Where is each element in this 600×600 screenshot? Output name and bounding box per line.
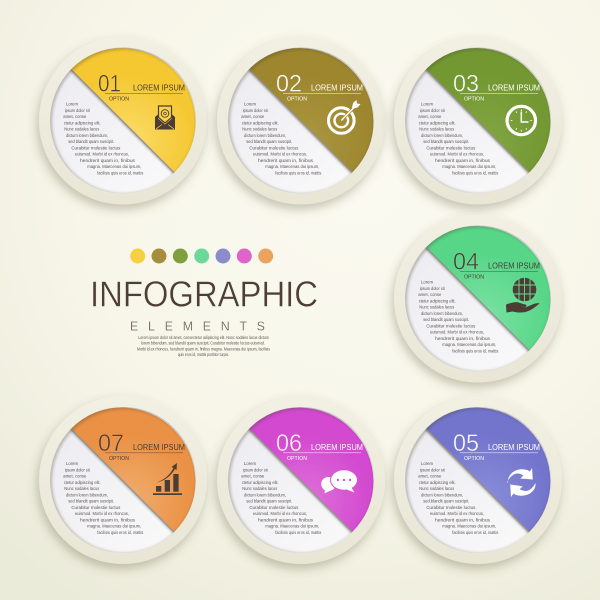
body text: dictum lorem bibendum, xyxy=(244,492,286,497)
body text: Curabitur molestie luctus xyxy=(249,505,298,510)
body text: magna. Maecenas dui ipsum, xyxy=(442,524,496,529)
number 06: 06 xyxy=(276,430,302,457)
number 01: 01 xyxy=(98,70,121,98)
body text: Lorem xyxy=(66,461,78,466)
body text: dictum lorem bibendum, xyxy=(421,492,463,497)
body text: Curabitur molestie luctus xyxy=(426,323,475,328)
body text: hendrerit quam in, finibus xyxy=(258,517,313,522)
icon: globe held in hand xyxy=(506,278,540,313)
body text: dictum lorem bibendum, xyxy=(421,133,463,138)
body text: ctetur adipiscing elit. xyxy=(242,480,279,485)
body text: magna. Maecenas dui ipsum, xyxy=(442,342,496,347)
heading: LOREM IPSUM xyxy=(488,262,540,270)
body text: sed blandit quam suscipit. xyxy=(246,139,292,144)
body text: hendrerit quam in, finibus xyxy=(435,158,490,163)
title: INFOGRAPHIC xyxy=(90,274,318,315)
body text: dictum lorem bibendum, xyxy=(66,133,108,138)
body text: ctetur adipiscing elit. xyxy=(419,298,456,303)
body text: ipsum dolor sit xyxy=(420,467,445,472)
body text: ipsum dolor sit xyxy=(65,467,90,472)
heading: LOREM IPSUM xyxy=(488,84,540,92)
number 05: 05 xyxy=(453,430,479,457)
body text: dictum lorem bibendum, xyxy=(66,492,108,497)
body text: Lorem xyxy=(421,102,433,106)
body text: amet, conse xyxy=(241,474,265,479)
body text: magna. Maecenas dui ipsum, xyxy=(265,524,319,529)
body text: Nunc sodales lacus xyxy=(242,127,277,132)
body text: amet, conse xyxy=(418,114,442,119)
body text: facilisis quis eros id, mattis xyxy=(97,170,143,175)
body text xyxy=(63,102,143,175)
body text: euismod. Morbi id ex rhoncus, xyxy=(430,511,484,516)
body text: amet, conse xyxy=(63,114,87,119)
body text: Lorem xyxy=(421,280,433,284)
body text: magna. Maecenas dui ipsum, xyxy=(87,524,141,529)
body text: magna. Maecenas dui ipsum, xyxy=(87,164,141,169)
body text: hendrerit quam in, finibus xyxy=(80,517,135,522)
body text: euismod. Morbi id ex rhoncus, xyxy=(253,152,307,157)
body text: amet, conse xyxy=(418,474,442,479)
body text: sed blandit quam suscipit. xyxy=(423,139,469,144)
body text: hendrerit quam in, finibus xyxy=(435,336,490,341)
option label: OPTION xyxy=(464,96,484,102)
body text: ctetur adipiscing elit. xyxy=(419,480,456,485)
description paragraph: quis eros id, mattis porttitor turpis. xyxy=(178,352,229,357)
body text: Curabitur molestie luctus xyxy=(426,505,475,510)
description paragraph: lorem bibendum, sed blandit quam suscipit. Curabitur molestie luctus euismod. xyxy=(141,341,265,346)
colour dots row xyxy=(130,248,273,264)
body text: ipsum dolor sit xyxy=(243,467,268,472)
body text xyxy=(241,102,321,175)
heading: LOREM IPSUM xyxy=(488,443,540,452)
circle card 03: clock xyxy=(394,36,562,204)
body text: sed blandit quam suscipit. xyxy=(246,499,292,504)
body text: euismod. Morbi id ex rhoncus, xyxy=(430,330,484,335)
body text xyxy=(418,102,498,175)
body text xyxy=(418,280,498,353)
option label: OPTION xyxy=(109,456,129,462)
body text: Nunc sodales lacus xyxy=(64,127,99,132)
option label: OPTION xyxy=(109,96,129,102)
circle card 05: refresh xyxy=(394,396,562,564)
description paragraph: Lorem ipsum dolor sit amet, consectetur adipiscing elit. Nunc sodales lacus dictum xyxy=(138,335,269,340)
number 02: 02 xyxy=(276,70,302,98)
body text: hendrerit quam in, finibus xyxy=(80,158,135,163)
body text xyxy=(418,461,498,535)
body text: Lorem xyxy=(244,102,256,106)
body text: Nunc sodales lacus xyxy=(419,127,454,132)
body text: Lorem xyxy=(66,102,78,106)
body text: ctetur adipiscing elit. xyxy=(242,120,279,125)
body text: ctetur adipiscing elit. xyxy=(419,120,456,125)
body text: ctetur adipiscing elit. xyxy=(64,480,101,485)
body text: ipsum dolor sit xyxy=(243,108,268,113)
option label: OPTION xyxy=(287,456,307,462)
body text: dictum lorem bibendum, xyxy=(244,133,286,138)
body text: sed blandit quam suscipit. xyxy=(423,499,469,504)
circle card 07: growth chart xyxy=(39,396,207,564)
heading: LOREM IPSUM xyxy=(133,84,185,92)
body text: sed blandit quam suscipit. xyxy=(68,139,114,144)
body text: Nunc sodales lacus xyxy=(419,305,454,310)
description paragraph: Morbi id ex rhoncus, hendrerit quam in, finibus magna. Maecenas dui ipsum, facilisis xyxy=(137,346,270,351)
body text: hendrerit quam in, finibus xyxy=(258,158,313,163)
body text: Nunc sodales lacus xyxy=(419,486,454,491)
body text: facilisis quis eros id, mattis xyxy=(275,170,321,175)
option label: OPTION xyxy=(464,456,484,462)
subtitle: ELEMENTS xyxy=(130,320,265,334)
body text: ipsum dolor sit xyxy=(65,108,90,113)
body text: facilisis quis eros id, mattis xyxy=(452,530,498,535)
circle card 06: chat bubbles xyxy=(217,396,385,564)
heading: LOREM IPSUM xyxy=(311,443,363,452)
heading: LOREM IPSUM xyxy=(133,443,185,452)
body text: amet, conse xyxy=(63,474,87,479)
body text: facilisis quis eros id, mattis xyxy=(275,530,321,535)
circle card 01: email xyxy=(39,36,207,204)
body text: Lorem xyxy=(421,461,433,466)
body text: sed blandit quam suscipit. xyxy=(423,317,469,322)
body text: amet, conse xyxy=(418,292,442,297)
number 07: 07 xyxy=(98,430,124,457)
number 03: 03 xyxy=(453,70,479,98)
description paragraph xyxy=(137,335,270,357)
body text: Curabitur molestie luctus xyxy=(249,145,298,150)
circle card 04: globe in hand xyxy=(394,214,562,382)
circle card 02: target xyxy=(217,36,385,204)
body text: Curabitur molestie luctus xyxy=(71,505,120,510)
body text: ipsum dolor sit xyxy=(420,286,445,291)
icon: target with arrow xyxy=(328,100,360,133)
heading: LOREM IPSUM xyxy=(311,84,363,92)
body text: sed blandit quam suscipit. xyxy=(68,499,114,504)
body text: facilisis quis eros id, mattis xyxy=(452,348,498,353)
body text: euismod. Morbi id ex rhoncus, xyxy=(75,152,129,157)
body text: hendrerit quam in, finibus xyxy=(435,517,490,522)
body text: euismod. Morbi id ex rhoncus, xyxy=(253,511,307,516)
body text: magna. Maecenas dui ipsum, xyxy=(442,164,496,169)
body text: facilisis quis eros id, mattis xyxy=(452,170,498,175)
option label: OPTION xyxy=(287,96,307,102)
body text xyxy=(63,461,143,535)
number 04: 04 xyxy=(453,248,479,276)
body text: dictum lorem bibendum, xyxy=(421,311,463,316)
icon: rising bar chart xyxy=(153,463,182,495)
body text: facilisis quis eros id, mattis xyxy=(97,530,143,535)
body text: euismod. Morbi id ex rhoncus, xyxy=(430,152,484,157)
body text: Lorem xyxy=(244,461,256,466)
body text xyxy=(241,461,321,535)
option label: OPTION xyxy=(464,274,484,280)
body text: Nunc sodales lacus xyxy=(64,486,99,491)
body text: Nunc sodales lacus xyxy=(242,486,277,491)
body text: ctetur adipiscing elit. xyxy=(64,120,101,125)
body text: Curabitur molestie luctus xyxy=(71,145,120,150)
body text: magna. Maecenas dui ipsum, xyxy=(265,164,319,169)
body text: Curabitur molestie luctus xyxy=(426,145,475,150)
icon: clock xyxy=(507,106,536,135)
icon: refresh arrows xyxy=(507,468,536,497)
body text: ipsum dolor sit xyxy=(420,108,445,113)
body text: euismod. Morbi id ex rhoncus, xyxy=(75,511,129,516)
icon: email envelope xyxy=(155,106,175,130)
body text: amet, conse xyxy=(241,114,265,119)
icon: chat bubbles xyxy=(321,469,358,494)
